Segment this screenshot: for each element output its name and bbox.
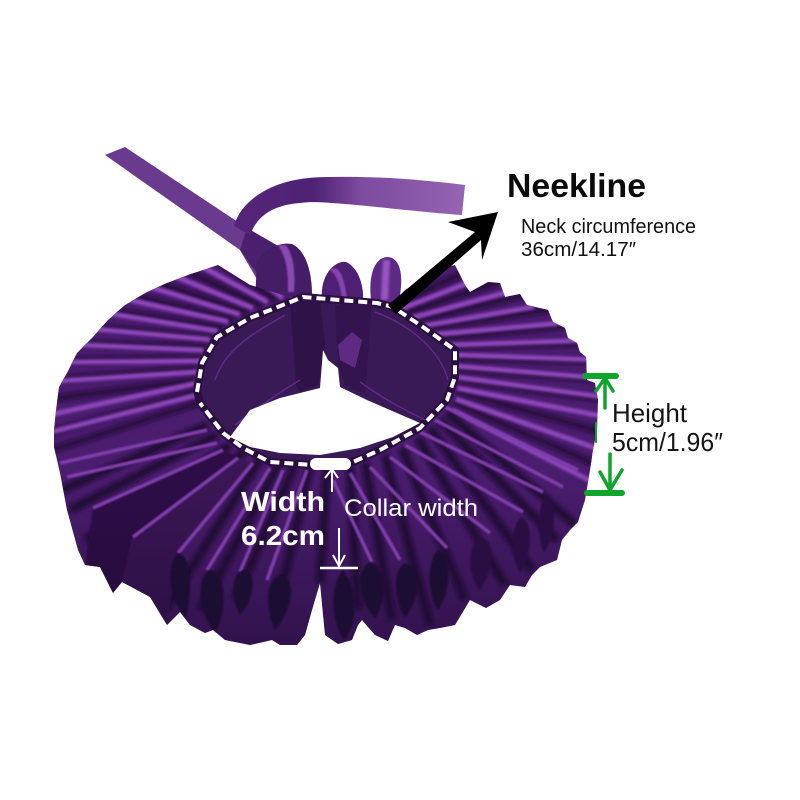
neck circumference label: 36cm/14.17″ [521,239,636,261]
infographic: pleated collar with dimensions [54,147,723,645]
neck opening (white gap) [230,350,420,455]
ribbon ties [105,147,465,300]
neckline arrow [388,212,498,314]
width label: Width [241,486,325,517]
lower pleats: dark flat faces, lower left [85,450,253,625]
height label: 5cm/1.96″ [612,427,723,457]
width label [241,486,325,551]
neck circumference label [521,216,696,261]
height label [612,398,723,457]
lower pleats: satin highlights [60,407,578,580]
height label: Height [612,398,688,428]
collar width label: Collar width [344,495,478,522]
neckline dashed outline [197,297,455,465]
upper pleats: grooves and satin highlights [54,265,598,484]
neckline heading: Neekline [507,167,646,204]
dark pleat loops along the lower edge [171,497,554,640]
lower edge shading [67,506,583,645]
neck circumference label: Neck circumference [521,216,696,238]
lower pleats: grooves [62,412,575,625]
inner lining of the neck opening [197,297,455,465]
width label: 6.2cm [241,520,325,551]
collar width marker pill [310,458,351,470]
collar width arrows [320,469,358,568]
collar pleats [54,265,598,645]
bow loops behind the neckline [255,244,401,305]
height marker: green arrows [585,376,622,493]
